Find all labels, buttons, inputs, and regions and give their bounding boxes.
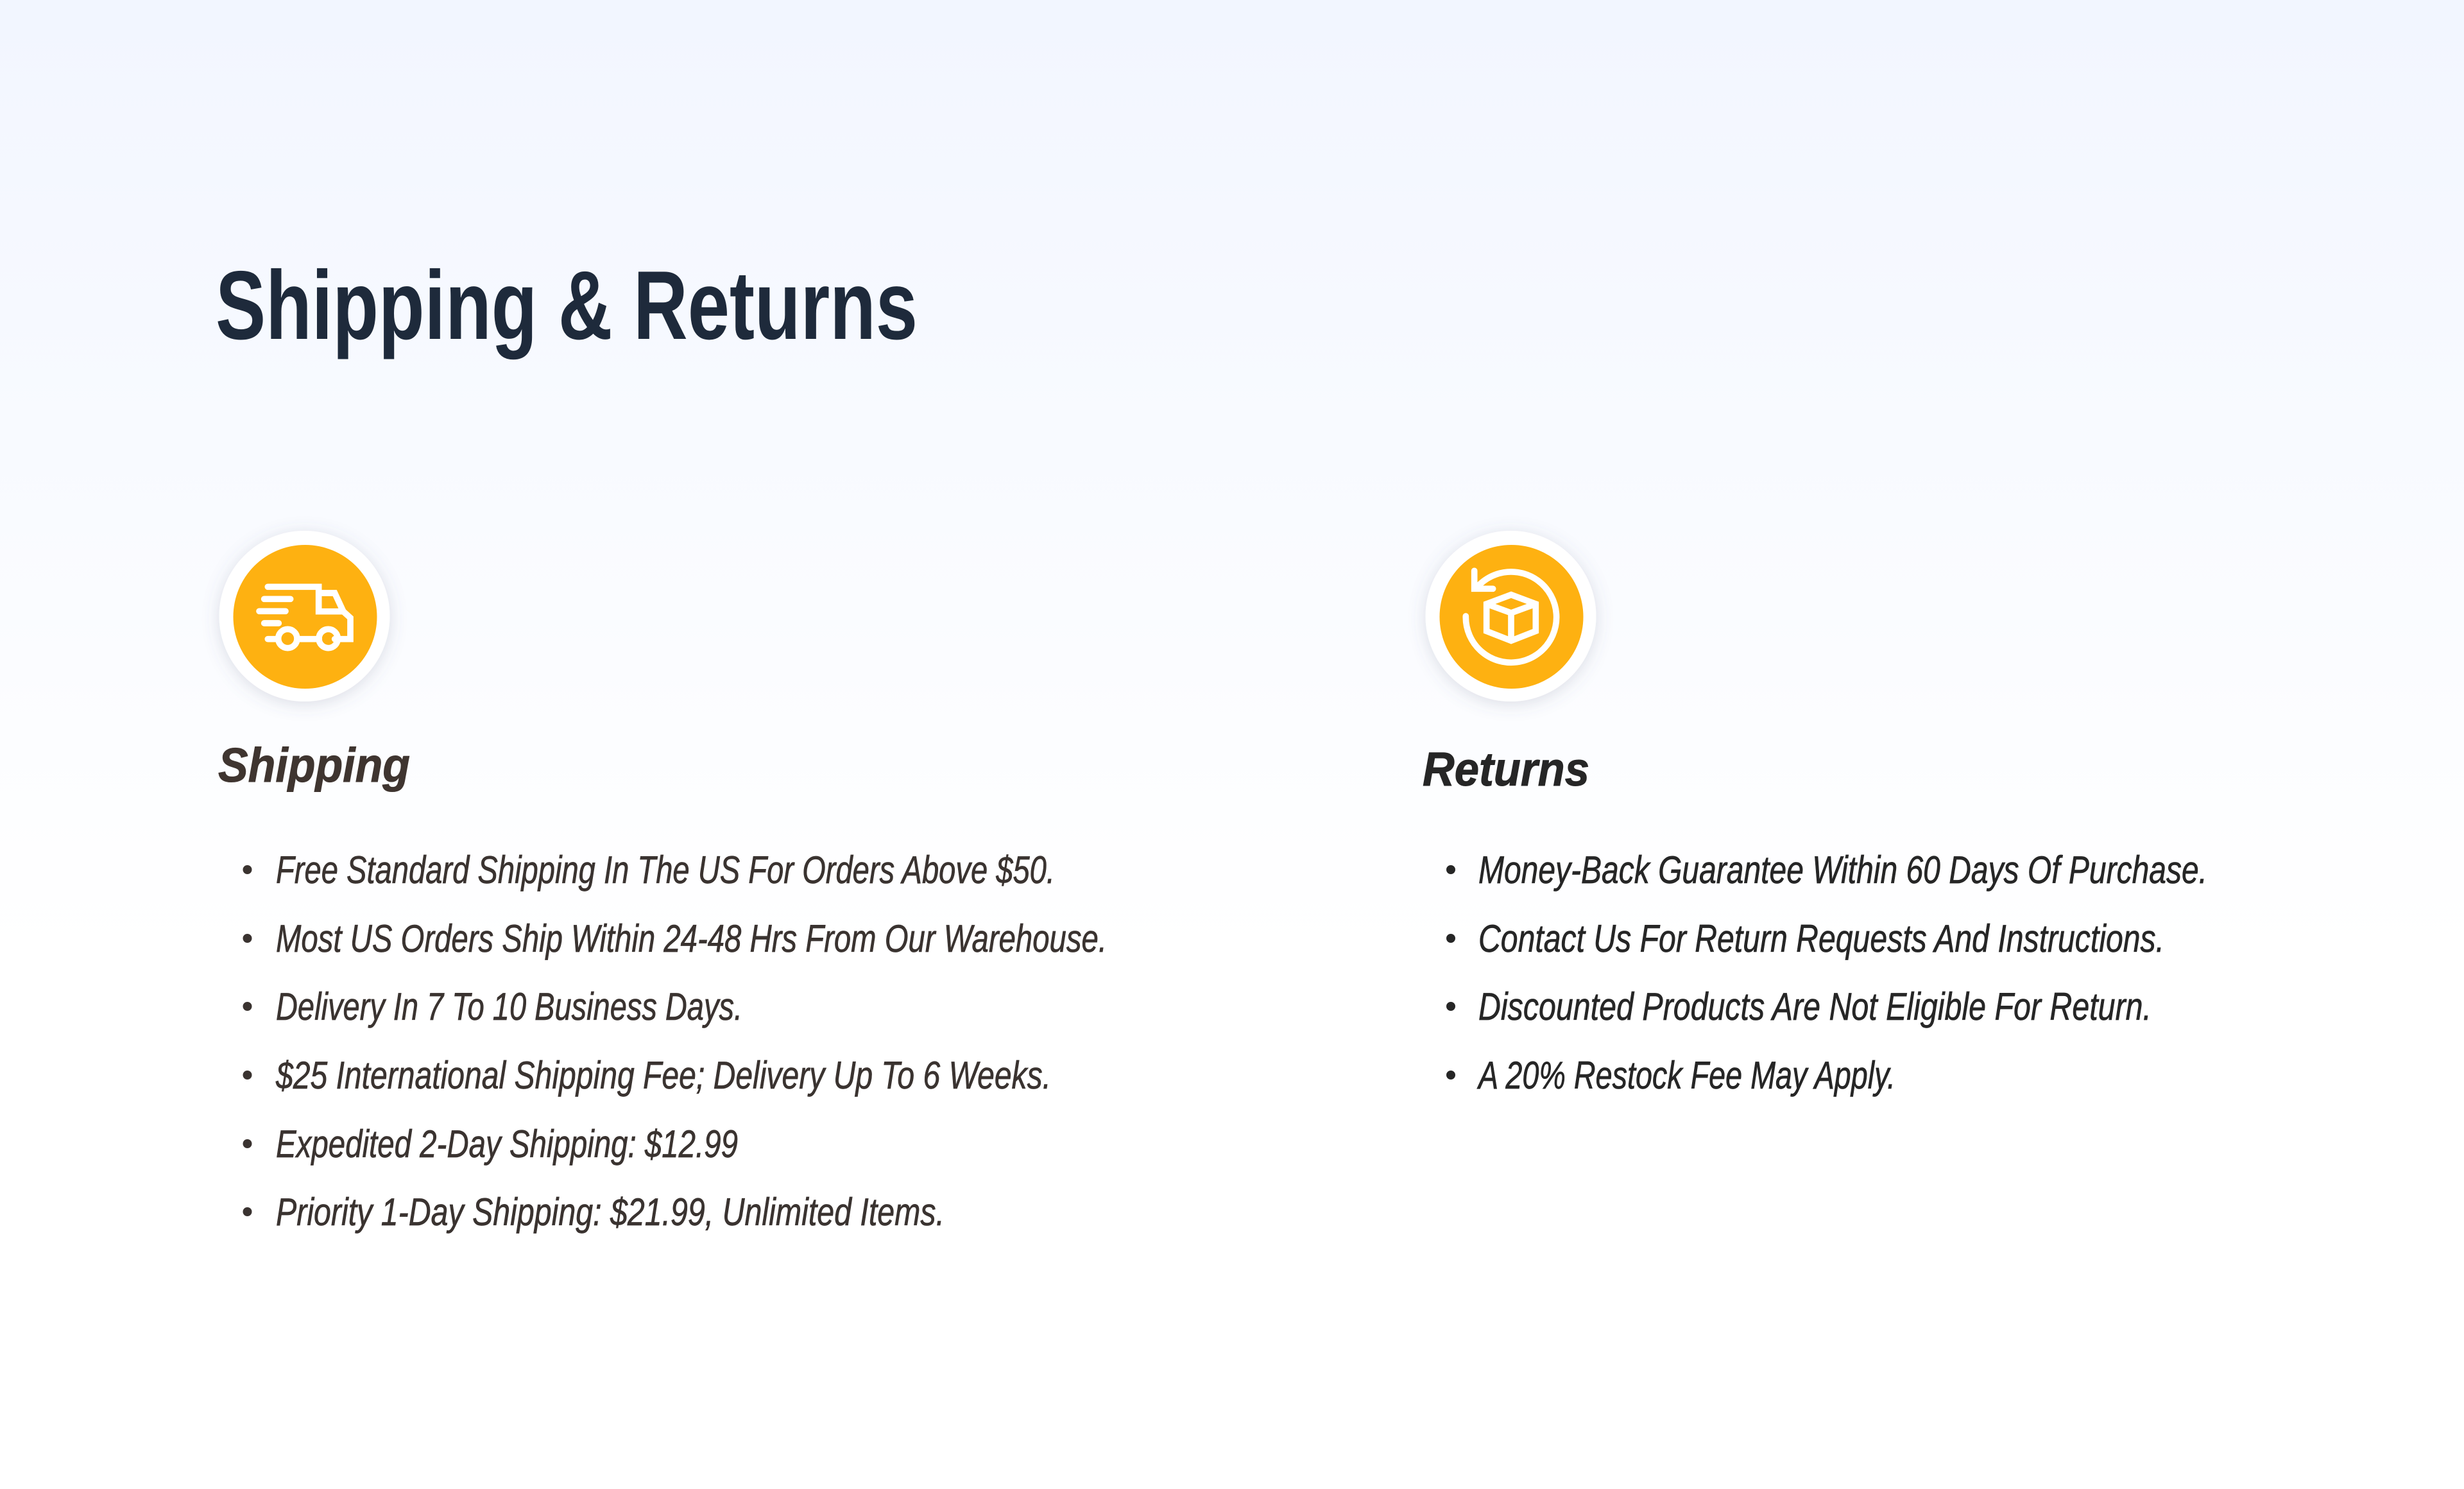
list: returns details: Money-Back Guarantee Within 60 Days Of Purchase.	[1478, 848, 2207, 891]
title: Shipping & Returns	[216, 251, 918, 360]
icon: returns box	[1426, 531, 1596, 701]
panel: shipping	[218, 531, 1107, 1234]
list: shipping details: Priority 1-Day Shipping: $21.99, Unlimited Items.	[276, 1191, 945, 1234]
heading: shipping: Shipping	[218, 738, 410, 792]
list: returns details: A 20% Restock Fee May Apply.	[1477, 1054, 1895, 1097]
list: shipping details	[243, 848, 1107, 1234]
list: shipping details: $25 International Shipping Fee; Delivery Up To 6 Weeks.	[275, 1054, 1051, 1097]
list: returns details: Discounted Products Are Not Eligible For Return.	[1478, 985, 2152, 1028]
list: shipping details: Delivery In 7 To 10 Business Days.	[276, 985, 742, 1028]
list: returns details: Contact Us For Return Requests And Instructions.	[1478, 917, 2164, 960]
list: shipping details: Expedited 2-Day Shipping: $12.99	[276, 1123, 738, 1166]
list: returns details	[1446, 848, 2207, 1097]
heading: returns: Returns	[1423, 743, 1589, 796]
list: shipping details: Free Standard Shipping In The US For Orders Above $50.	[276, 848, 1055, 891]
list: shipping details: Most US Orders Ship Within 24-48 Hrs From Our Warehouse.	[276, 917, 1107, 960]
icon: shipping truck	[219, 531, 390, 701]
panel: returns	[1423, 531, 2207, 1097]
